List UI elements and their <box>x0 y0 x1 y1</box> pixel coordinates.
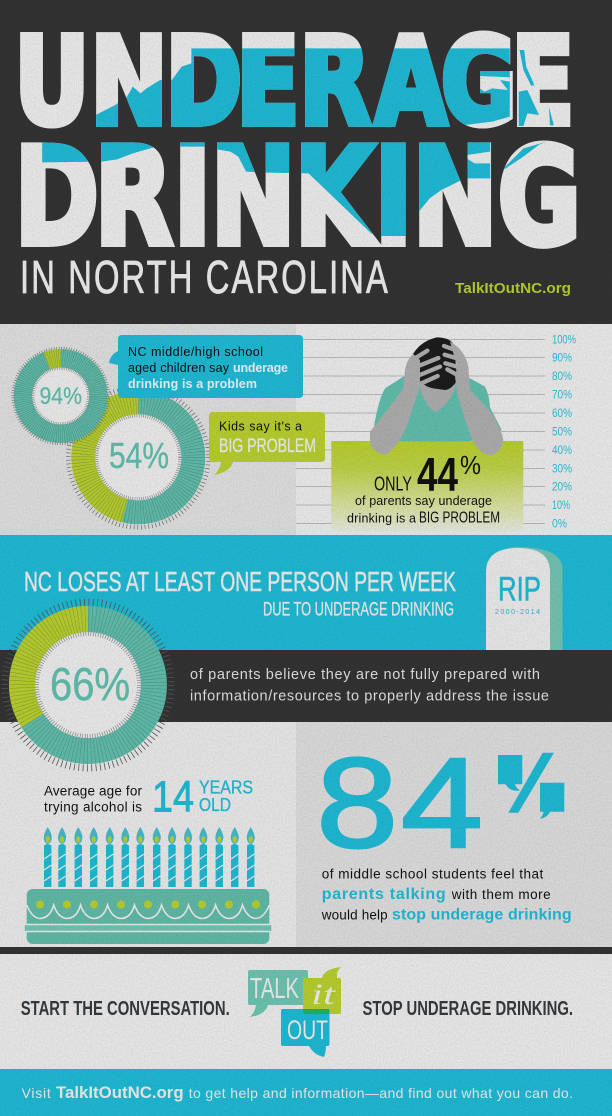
stat box: 44% of parents: drinking is a <box>347 512 416 526</box>
footer band <box>0 1069 612 1116</box>
panel: parents not prepared <box>0 650 612 722</box>
illustration: birthday cake <box>25 889 271 944</box>
donut chart: 66% <box>5 602 171 768</box>
percent scale chart: 50% <box>552 424 572 438</box>
footer text: TalkItOutNC.org <box>56 1083 184 1102</box>
illustration: birthday candles <box>44 827 255 887</box>
66% label: 66% <box>50 658 130 710</box>
callout: children say: aged children say <box>128 361 230 375</box>
text: middle school students: would help <box>321 907 388 922</box>
stat box: 44% of parents <box>331 337 523 531</box>
age text <box>44 773 253 822</box>
percent scale chart: 80% <box>552 369 572 383</box>
callout: children say: underage <box>233 361 288 375</box>
logo: talk it out: it <box>311 978 336 1011</box>
subheading: DUE TO UNDERAGE DRINKING <box>263 600 454 621</box>
text: middle school students: stop underage drinking <box>392 906 572 923</box>
age text: OLD <box>199 795 231 815</box>
age text: Average age for <box>44 784 142 799</box>
footer text <box>22 1083 573 1102</box>
panel: perception of the problem <box>0 324 612 535</box>
callout: children say: NC middle/high school <box>128 345 263 359</box>
text: middle school students: with them more <box>451 887 551 902</box>
percent scale chart: 30% <box>552 462 572 476</box>
percent scale chart: 100% <box>552 332 576 346</box>
North Carolina map inside title letters <box>42 48 554 236</box>
text: middle school students: parents talking <box>322 886 446 903</box>
footer text: to get help and information—and find out what you can do. <box>189 1085 573 1101</box>
stat box: 44% of parents: % <box>460 450 481 480</box>
callout: children say: drinking is a problem <box>128 377 257 391</box>
title <box>20 30 576 249</box>
donut chart: 54% <box>68 387 208 527</box>
parents text: of parents believe they are not fully prepared with <box>190 667 540 683</box>
panel: parents not prepared: information/resources to properly address the issue <box>190 689 549 705</box>
header background <box>0 0 612 324</box>
panel: lower stats <box>0 722 612 947</box>
stat box: 44% of parents: ONLY <box>374 474 412 496</box>
percent scale chart <box>296 332 576 530</box>
age text: trying alcohol is <box>44 800 142 815</box>
illustration: worried parent <box>370 337 503 455</box>
divider band <box>0 947 612 954</box>
stat box: 44% of parents: 44 <box>417 448 458 500</box>
icon: percent sign made of speech bubbles <box>498 753 564 819</box>
logo: talk it out: TALK <box>250 973 299 1005</box>
age text: YEARS <box>199 777 253 797</box>
text: middle school students <box>321 866 572 923</box>
title text: Underage Drinking <box>14 14 581 276</box>
54% label: 54% <box>109 435 169 476</box>
website link: TalkItOutNC.org <box>455 281 571 297</box>
callout: kids say big problem: Kids say it's a <box>219 420 302 434</box>
percent scale chart: 40% <box>552 443 572 457</box>
percent scale chart: 10% <box>552 498 570 512</box>
callout: kids say big problem <box>209 412 325 475</box>
callout: kids say big problem: BIG PROBLEM <box>219 435 316 457</box>
stat: 84: 84 <box>316 732 483 875</box>
percent scale chart: 70% <box>552 388 572 402</box>
stat box: 44% of parents: BIG PROBLEM <box>419 510 500 526</box>
panel: lives lost <box>0 535 612 650</box>
title text: Underage Drinking: UNDERAGE <box>14 14 574 153</box>
icon: tombstone <box>486 547 562 650</box>
panel: call to action <box>0 954 612 1069</box>
percent scale chart: 90% <box>552 350 572 364</box>
text: start the conversation: START THE CONVERSATION. <box>21 998 230 1020</box>
percent scale chart: 0% <box>552 516 567 530</box>
donut chart: 94% <box>13 348 108 444</box>
callout: children say <box>109 335 303 398</box>
subtitle: IN NORTH CAROLINA <box>20 251 390 303</box>
94% label: 94% <box>40 383 82 410</box>
age text: 14 <box>152 773 194 822</box>
stat box: 44% of parents: of parents say underage <box>355 494 492 508</box>
icon: tombstone: RIP <box>498 571 541 609</box>
logo: talk it out <box>248 967 341 1057</box>
logo: talk it out: OUT <box>287 1015 328 1045</box>
icon: tombstone: 2000-2014 <box>495 609 540 616</box>
title text: Underage Drinking: DRINKING <box>14 121 581 276</box>
percent scale chart: 20% <box>552 480 572 494</box>
percent scale chart: 60% <box>552 406 572 420</box>
footer text: Visit <box>22 1085 51 1101</box>
text: middle school students: of middle school students feel that <box>322 866 544 881</box>
